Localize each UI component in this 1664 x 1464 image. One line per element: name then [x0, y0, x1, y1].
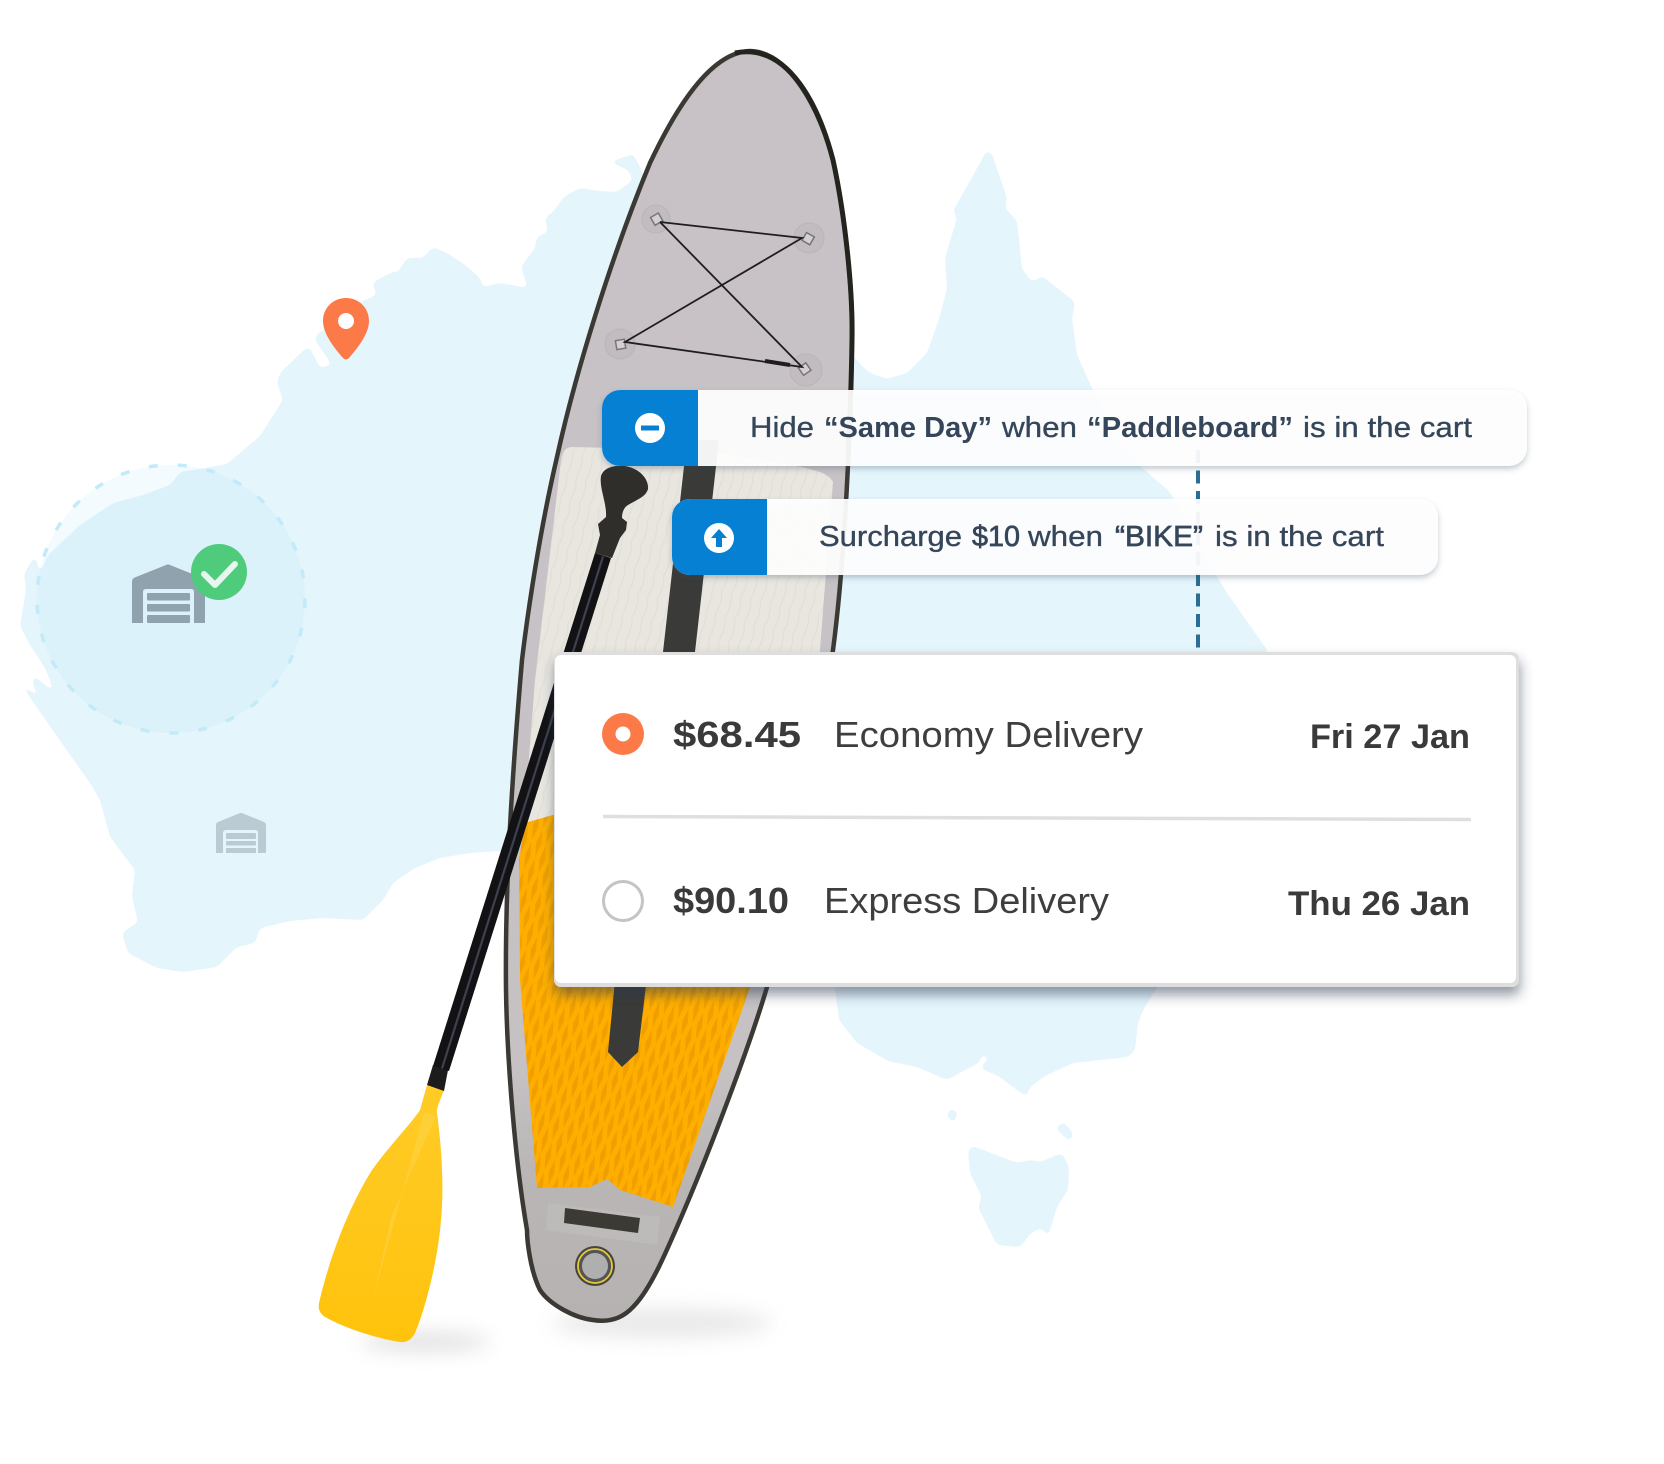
ground shadows — [360, 1309, 772, 1350]
rule text — [750, 412, 1472, 444]
rule text: is in the cart — [1303, 412, 1472, 444]
map: Australia — [17, 150, 1268, 1247]
rule: hide same day — [602, 390, 1527, 466]
icon: up arrow — [704, 523, 734, 553]
toast background — [672, 499, 1438, 575]
option: economy — [602, 713, 1470, 756]
option: express — [604, 880, 1470, 923]
deck pad orange — [519, 770, 790, 1207]
price: $90.10 — [673, 880, 789, 921]
service name: Express Delivery — [824, 880, 1109, 921]
centre stripe lower — [608, 960, 649, 1067]
deck pad white — [524, 447, 833, 823]
rule text: “BIKE” — [1115, 521, 1203, 553]
paddleboard — [506, 51, 852, 1321]
service name: Economy Delivery — [834, 714, 1143, 755]
dark right rail — [735, 52, 852, 460]
paddle collar — [427, 1065, 448, 1091]
strap patch — [546, 1203, 660, 1245]
carry strap — [564, 1208, 640, 1233]
card frame — [554, 652, 1519, 987]
rule text: when — [1027, 521, 1103, 553]
centre stripe upper — [663, 440, 719, 652]
rule text: is in the cart — [1215, 521, 1384, 553]
toast background — [602, 390, 1527, 466]
tasmania — [968, 1146, 1069, 1247]
date: Thu 26 Jan — [1288, 885, 1470, 923]
icon: warehouse with check — [132, 544, 247, 623]
radio selected — [602, 713, 644, 755]
icon: location pin — [323, 298, 369, 360]
mainland — [17, 150, 1268, 1097]
rule text — [819, 521, 1384, 553]
flinders island — [1055, 1122, 1074, 1141]
bungee rings — [615, 213, 814, 375]
card face — [555, 655, 1516, 983]
rule text: “Same Day” — [824, 412, 992, 444]
rule text: $10 — [972, 521, 1020, 553]
icon: faded warehouse — [216, 813, 266, 853]
blue tab — [672, 499, 767, 575]
king island — [946, 1108, 958, 1124]
price: $68.45 — [673, 714, 801, 755]
rule text: Hide — [750, 412, 814, 444]
warehouse radius circle — [37, 465, 305, 733]
icon: green check badge — [191, 544, 247, 600]
date: Fri 27 Jan — [1310, 718, 1470, 756]
paddle blade — [319, 1085, 444, 1342]
valve — [575, 1246, 615, 1286]
paddle shaft — [433, 553, 611, 1071]
blade ridge — [372, 1112, 436, 1303]
delivery options card — [554, 652, 1519, 987]
bungee cords — [625, 222, 802, 367]
paddle — [319, 466, 648, 1342]
paddle handle — [595, 466, 648, 558]
dashed connector line — [1196, 450, 1200, 651]
radio empty — [604, 882, 642, 920]
blue tab — [602, 390, 698, 466]
rule: surcharge — [672, 499, 1438, 575]
rule text: “Paddleboard” — [1087, 412, 1293, 444]
board body — [506, 51, 852, 1321]
rule text: Surcharge — [819, 521, 962, 553]
icon: minus — [635, 413, 665, 443]
bungee anchors — [605, 205, 824, 386]
rule text: when — [1001, 412, 1077, 444]
bungee buckle — [765, 361, 790, 365]
